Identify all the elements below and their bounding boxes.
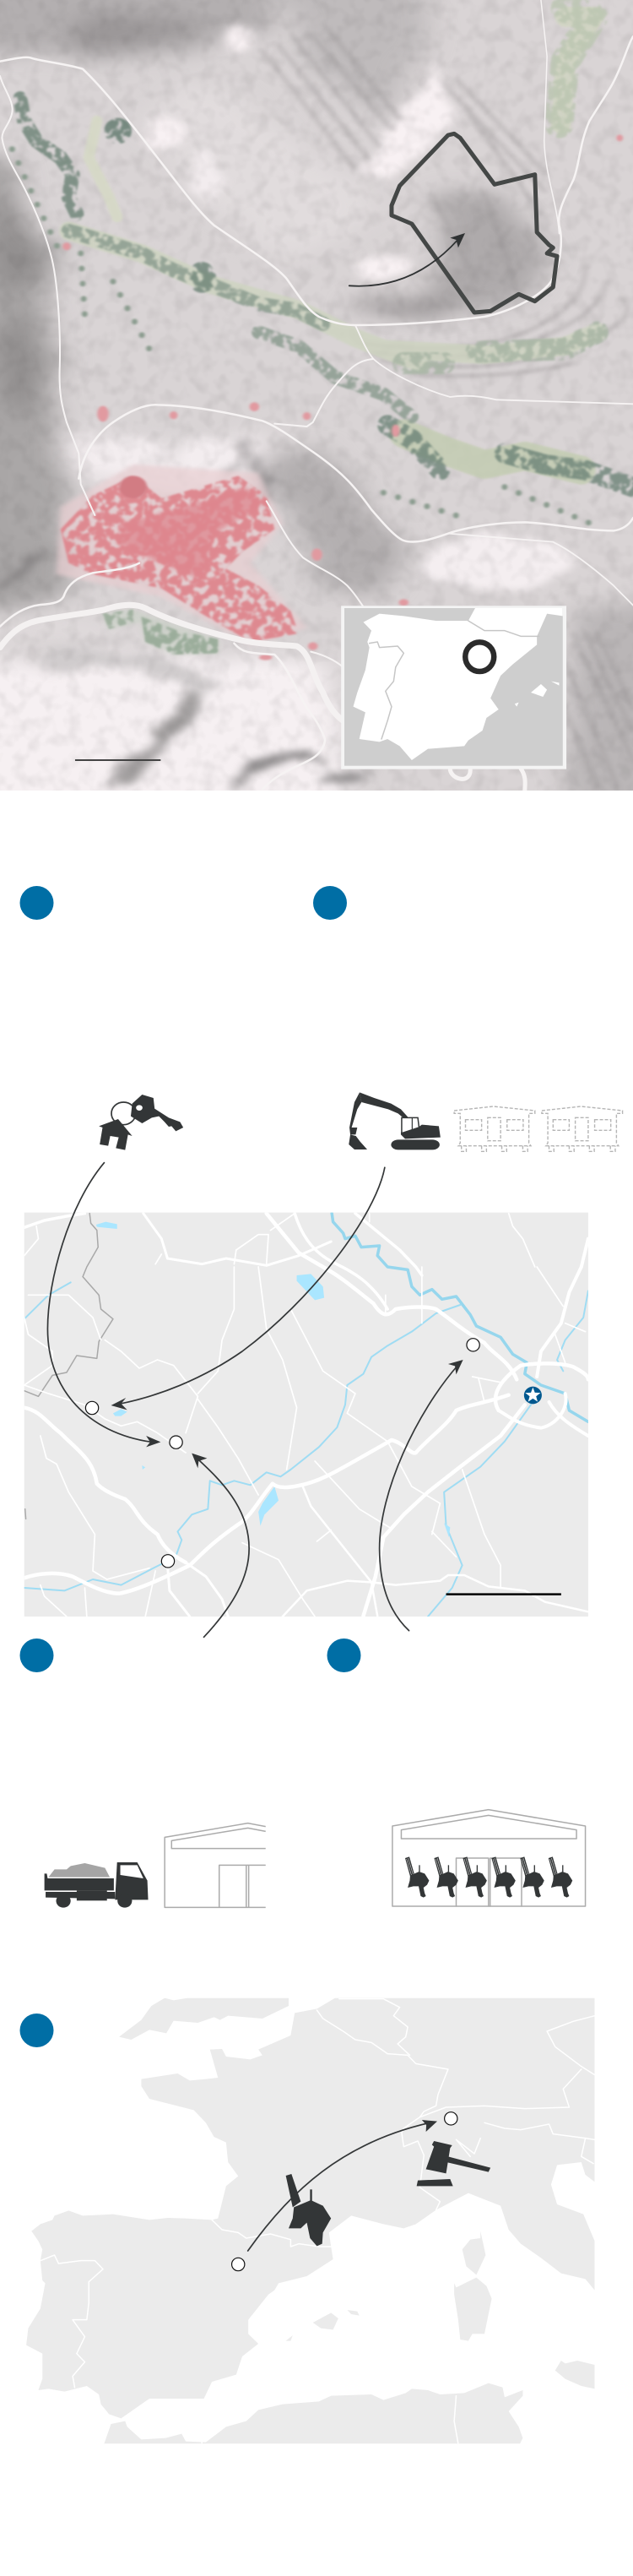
ground grain texture [0, 0, 633, 791]
arrow: keys to town [47, 1163, 160, 1447]
step badge 5 [20, 2014, 54, 2047]
terrain shading [0, 0, 633, 818]
panel: regional map with route arrows [24, 1163, 588, 1637]
vegetation [12, 8, 633, 655]
icon: helmet [286, 2174, 331, 2246]
border [24, 1214, 113, 1519]
location ring [465, 642, 494, 671]
step badge 3 [20, 1639, 54, 1672]
panel: shaded relief terrain map [0, 0, 633, 818]
village buildings [57, 134, 623, 660]
icon: gavel [417, 2141, 490, 2186]
rivers and reservoirs [24, 1214, 588, 1617]
arrow to hill [349, 233, 465, 286]
icon: excavator [349, 1092, 441, 1149]
arrow: excavator to town [111, 1167, 385, 1410]
arrow: truck to town [192, 1454, 249, 1637]
country borders [41, 1999, 595, 2443]
arrow: warehouse to city [380, 1360, 463, 1631]
step badge 2 [313, 886, 347, 920]
step badge 1 [20, 886, 54, 920]
icon: dump truck [45, 1862, 149, 1908]
scale bar [446, 1593, 561, 1595]
location dots [85, 1339, 479, 1568]
hillside stripes [262, 28, 633, 788]
location dots [232, 2112, 457, 2271]
icon: warehouse with helmets [392, 1810, 586, 1906]
icons: truck and warehouses [45, 1810, 586, 1908]
step badge 4 [327, 1639, 361, 1672]
vegetation patch south of the village [102, 610, 218, 655]
roads [24, 1214, 588, 1617]
inset map of Iberia [341, 606, 566, 769]
panel: Europe map [26, 1998, 595, 2443]
icon: partial warehouse [165, 1823, 266, 1907]
land masses [26, 1998, 595, 2443]
icon: house and keys [99, 1095, 183, 1150]
Adriatic sea [551, 2162, 595, 2241]
arrow: Spain to Switzerland [248, 2120, 437, 2251]
parcel outline [392, 133, 557, 312]
icon: dashed houses [454, 1106, 623, 1151]
icons above the regional map [99, 1092, 623, 1151]
scale bar [75, 759, 160, 761]
city marker star [524, 1387, 542, 1404]
roads [0, 0, 633, 791]
